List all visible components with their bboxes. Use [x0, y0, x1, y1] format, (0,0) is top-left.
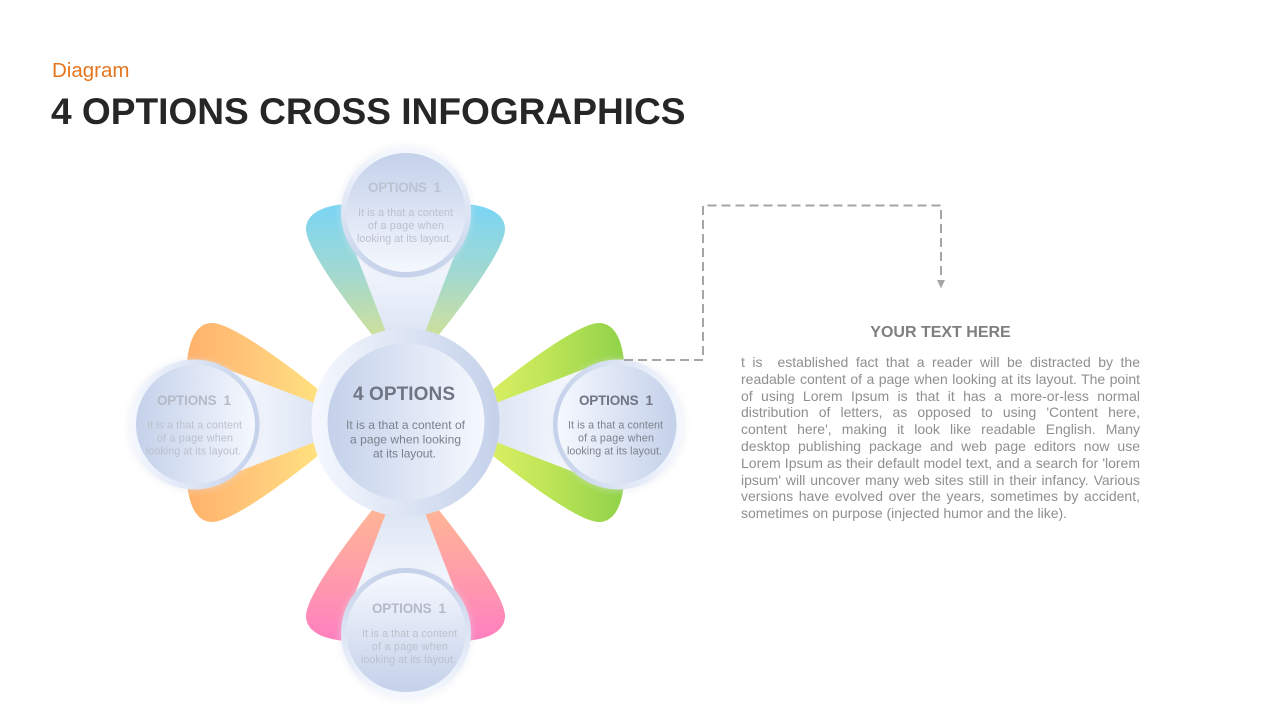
option circle: left: [127, 358, 261, 492]
option circle: top: OPTIONS 1: [368, 180, 441, 195]
center circle: 4 OPTIONS: [353, 384, 455, 405]
center circle: at its layout.: [373, 446, 436, 460]
option circle: left: looking at its layout.: [146, 446, 241, 458]
subtitle: Diagram: [52, 59, 129, 82]
option circle: top: of a page when: [368, 220, 444, 232]
petal: bottom pink: [306, 509, 505, 641]
petal: right green: [492, 323, 624, 522]
option circle: right: of a page when: [578, 432, 654, 444]
option circle: top: It is a that a content: [358, 207, 453, 219]
option circle: right: It is a that a content: [568, 420, 663, 432]
text paragraph: readable content of a page when looking at its layout. The point: [741, 371, 1140, 387]
option circle: left: of a page when: [157, 432, 233, 444]
option circle: bottom: [339, 567, 473, 701]
option circle: bottom: It is a that a content: [362, 628, 457, 640]
option circle: top: looking at its layout.: [357, 233, 452, 245]
text paragraph: content here', making it look like readable English. Many: [741, 421, 1140, 437]
text paragraph: distribution of letters, as opposed to using 'Content here,: [741, 404, 1140, 420]
text paragraph: versions have evolved over the years, sometimes by accident,: [741, 488, 1140, 504]
petal: left orange: [187, 323, 319, 522]
text paragraph: t is established fact that a reader will be distracted by the: [741, 354, 1140, 370]
center circle: a page when looking: [350, 432, 461, 446]
title: 4 OPTIONS CROSS INFOGRAPHICS: [51, 90, 686, 132]
option circle: right: OPTIONS 1: [579, 393, 653, 408]
text paragraph: ipsum' will uncover many web sites still in their infancy. Various: [741, 472, 1140, 488]
text paragraph: of using Lorem Ipsum is that it has a more-or-less normal: [741, 388, 1140, 404]
text paragraph: [741, 354, 1140, 521]
text paragraph: Lorem Ipsum as their default model text, and a search for 'lorem: [741, 455, 1140, 471]
arrow: dashed connector: [624, 206, 945, 360]
option circle: right: looking at its layout.: [567, 446, 662, 458]
option circle: bottom: of a page when: [372, 641, 448, 653]
option circle: top: [339, 145, 473, 279]
text paragraph: desktop publishing package and web page editors now use: [741, 438, 1140, 454]
text heading: YOUR TEXT HERE: [870, 324, 1011, 341]
option circle: bottom: looking at its layout.: [361, 654, 456, 666]
option circle: left: OPTIONS 1: [157, 393, 231, 408]
option circle: right: [552, 358, 686, 492]
center circle: It is a that a content of: [346, 418, 466, 432]
text paragraph: sometimes on purpose (injected humor and the like).: [741, 505, 1067, 521]
option circle: bottom: OPTIONS 1: [372, 601, 446, 616]
petal: top blue: [306, 204, 505, 336]
option circle: left: It is a that a content: [147, 420, 242, 432]
center circle: [312, 328, 500, 516]
